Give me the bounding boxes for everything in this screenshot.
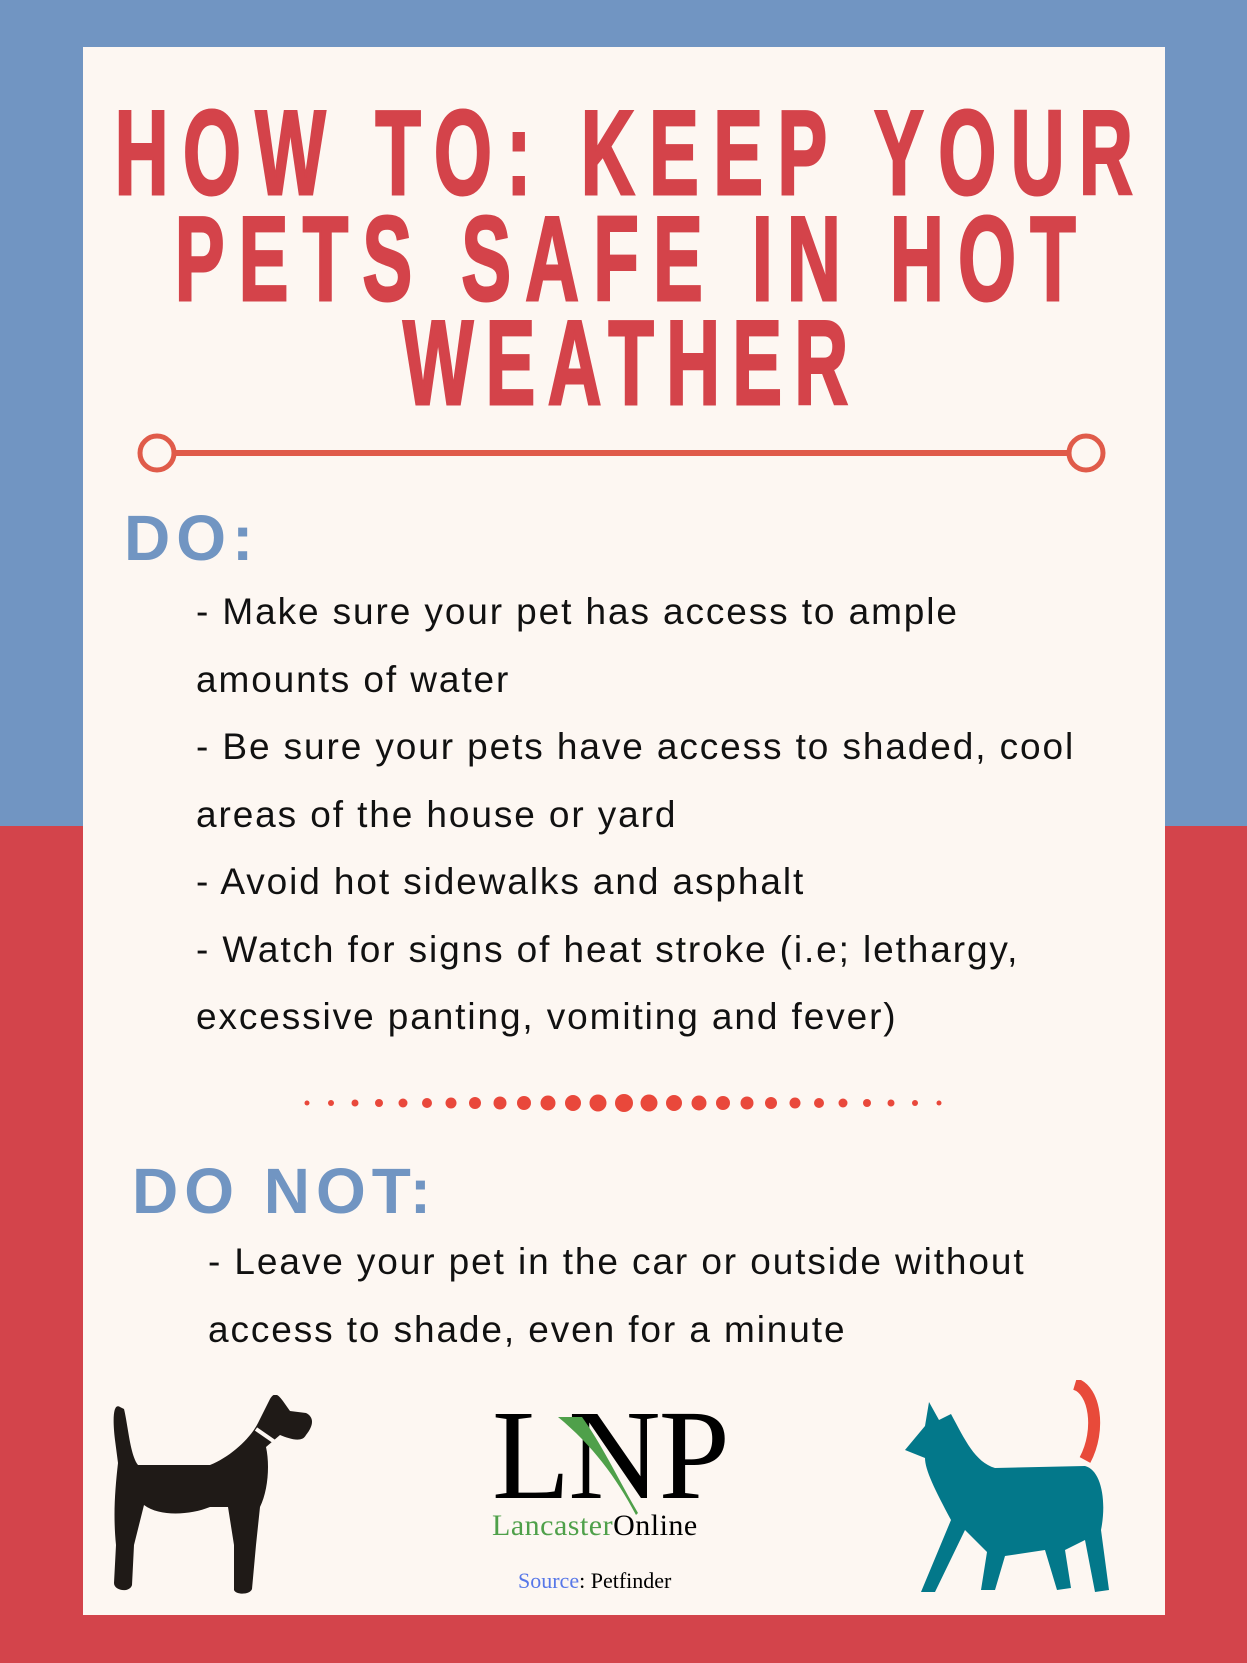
title: WEATHER: [403, 297, 848, 430]
heading: DO: DO:: [124, 502, 259, 574]
do list: areas of the house or yard: [196, 794, 677, 834]
do list: - Avoid hot sidewalks and asphalt: [196, 861, 805, 902]
source: Source: Petfinder: [518, 1568, 671, 1593]
icon: dog: [114, 1395, 312, 1594]
icon: cat: [905, 1380, 1109, 1592]
do not list: access to shade, even for a minute: [208, 1308, 846, 1350]
do list: excessive panting, vomiting and fever): [196, 996, 898, 1037]
dotted divider: [304, 1094, 942, 1112]
title: PETS SAFE IN HOT: [175, 193, 1076, 326]
divider line with circles: [138, 434, 1106, 472]
do list: amounts of water: [196, 658, 510, 700]
logo: LNP LancasterOnline: LNP: [492, 1384, 728, 1526]
do list: - Make sure your pet has access to ample: [196, 591, 959, 632]
do list: - Be sure your pets have access to shaded, cool: [196, 726, 1075, 767]
title: [115, 87, 1133, 430]
logo: LNP LancasterOnline: LancasterOnline: [492, 1509, 698, 1542]
do list: - Watch for signs of heat stroke (i.e; lethargy,: [196, 928, 1019, 970]
do list: [196, 591, 1075, 1037]
do not list: [208, 1241, 1026, 1350]
title: HOW TO: KEEP YOUR: [115, 87, 1133, 220]
heading: DO NOT: DO NOT:: [132, 1155, 437, 1227]
do not list: - Leave your pet in the car or outside without: [208, 1241, 1026, 1282]
